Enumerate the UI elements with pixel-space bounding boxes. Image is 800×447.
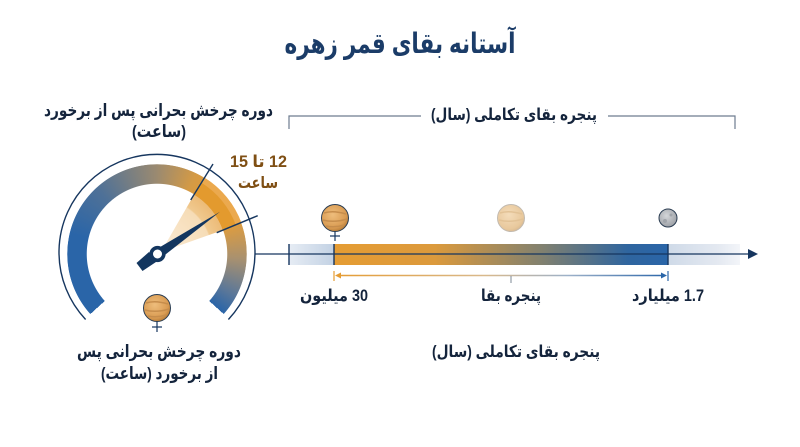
bracket heading: پنجره بقای تکاملی (سال)	[431, 106, 597, 125]
icon: Venus planet at 30 million	[322, 204, 348, 241]
label: 1.7 billion: 1.7 میلیارد	[632, 287, 704, 305]
gauge heading: دوره چرخش بحرانی پس از برخورد	[44, 101, 273, 121]
title: آستانه بقای قمر زهره	[284, 26, 517, 60]
label: survival window: پنجره بقا	[481, 287, 541, 306]
timeline axis with arrow	[255, 244, 758, 265]
gauge heading	[44, 101, 273, 141]
wedge: range sector	[161, 195, 223, 252]
gauge caption: از برخورد (ساعت)	[101, 364, 218, 384]
gauge outer arc	[59, 154, 255, 320]
survival window span arrow	[334, 271, 668, 283]
top bracket	[289, 106, 735, 129]
gauge caption	[77, 342, 241, 384]
icon: moon at 1.7 billion	[659, 209, 677, 227]
gauge colour band	[67, 164, 247, 314]
range label: 12 تا 15	[230, 153, 287, 171]
icon: Venus planet on gauge	[144, 294, 170, 332]
timeline bar	[289, 244, 740, 265]
timeline caption: پنجره بقای تکاملی (سال)	[432, 343, 600, 362]
range label	[230, 153, 287, 192]
range boundary line	[191, 164, 213, 200]
highlighted critical range on gauge	[161, 164, 258, 252]
label: 30 million: 30 میلیون	[300, 287, 368, 306]
gauge heading: (ساعت)	[132, 122, 186, 141]
icon: pale planet mid window	[498, 204, 524, 232]
gauge caption: دوره چرخش بحرانی پس	[77, 342, 241, 362]
range label: ساعت	[238, 175, 278, 192]
range boundary line	[217, 216, 258, 233]
band: inner highlight	[194, 183, 236, 230]
gauge needle	[136, 212, 220, 271]
band: outer highlight	[194, 178, 242, 230]
